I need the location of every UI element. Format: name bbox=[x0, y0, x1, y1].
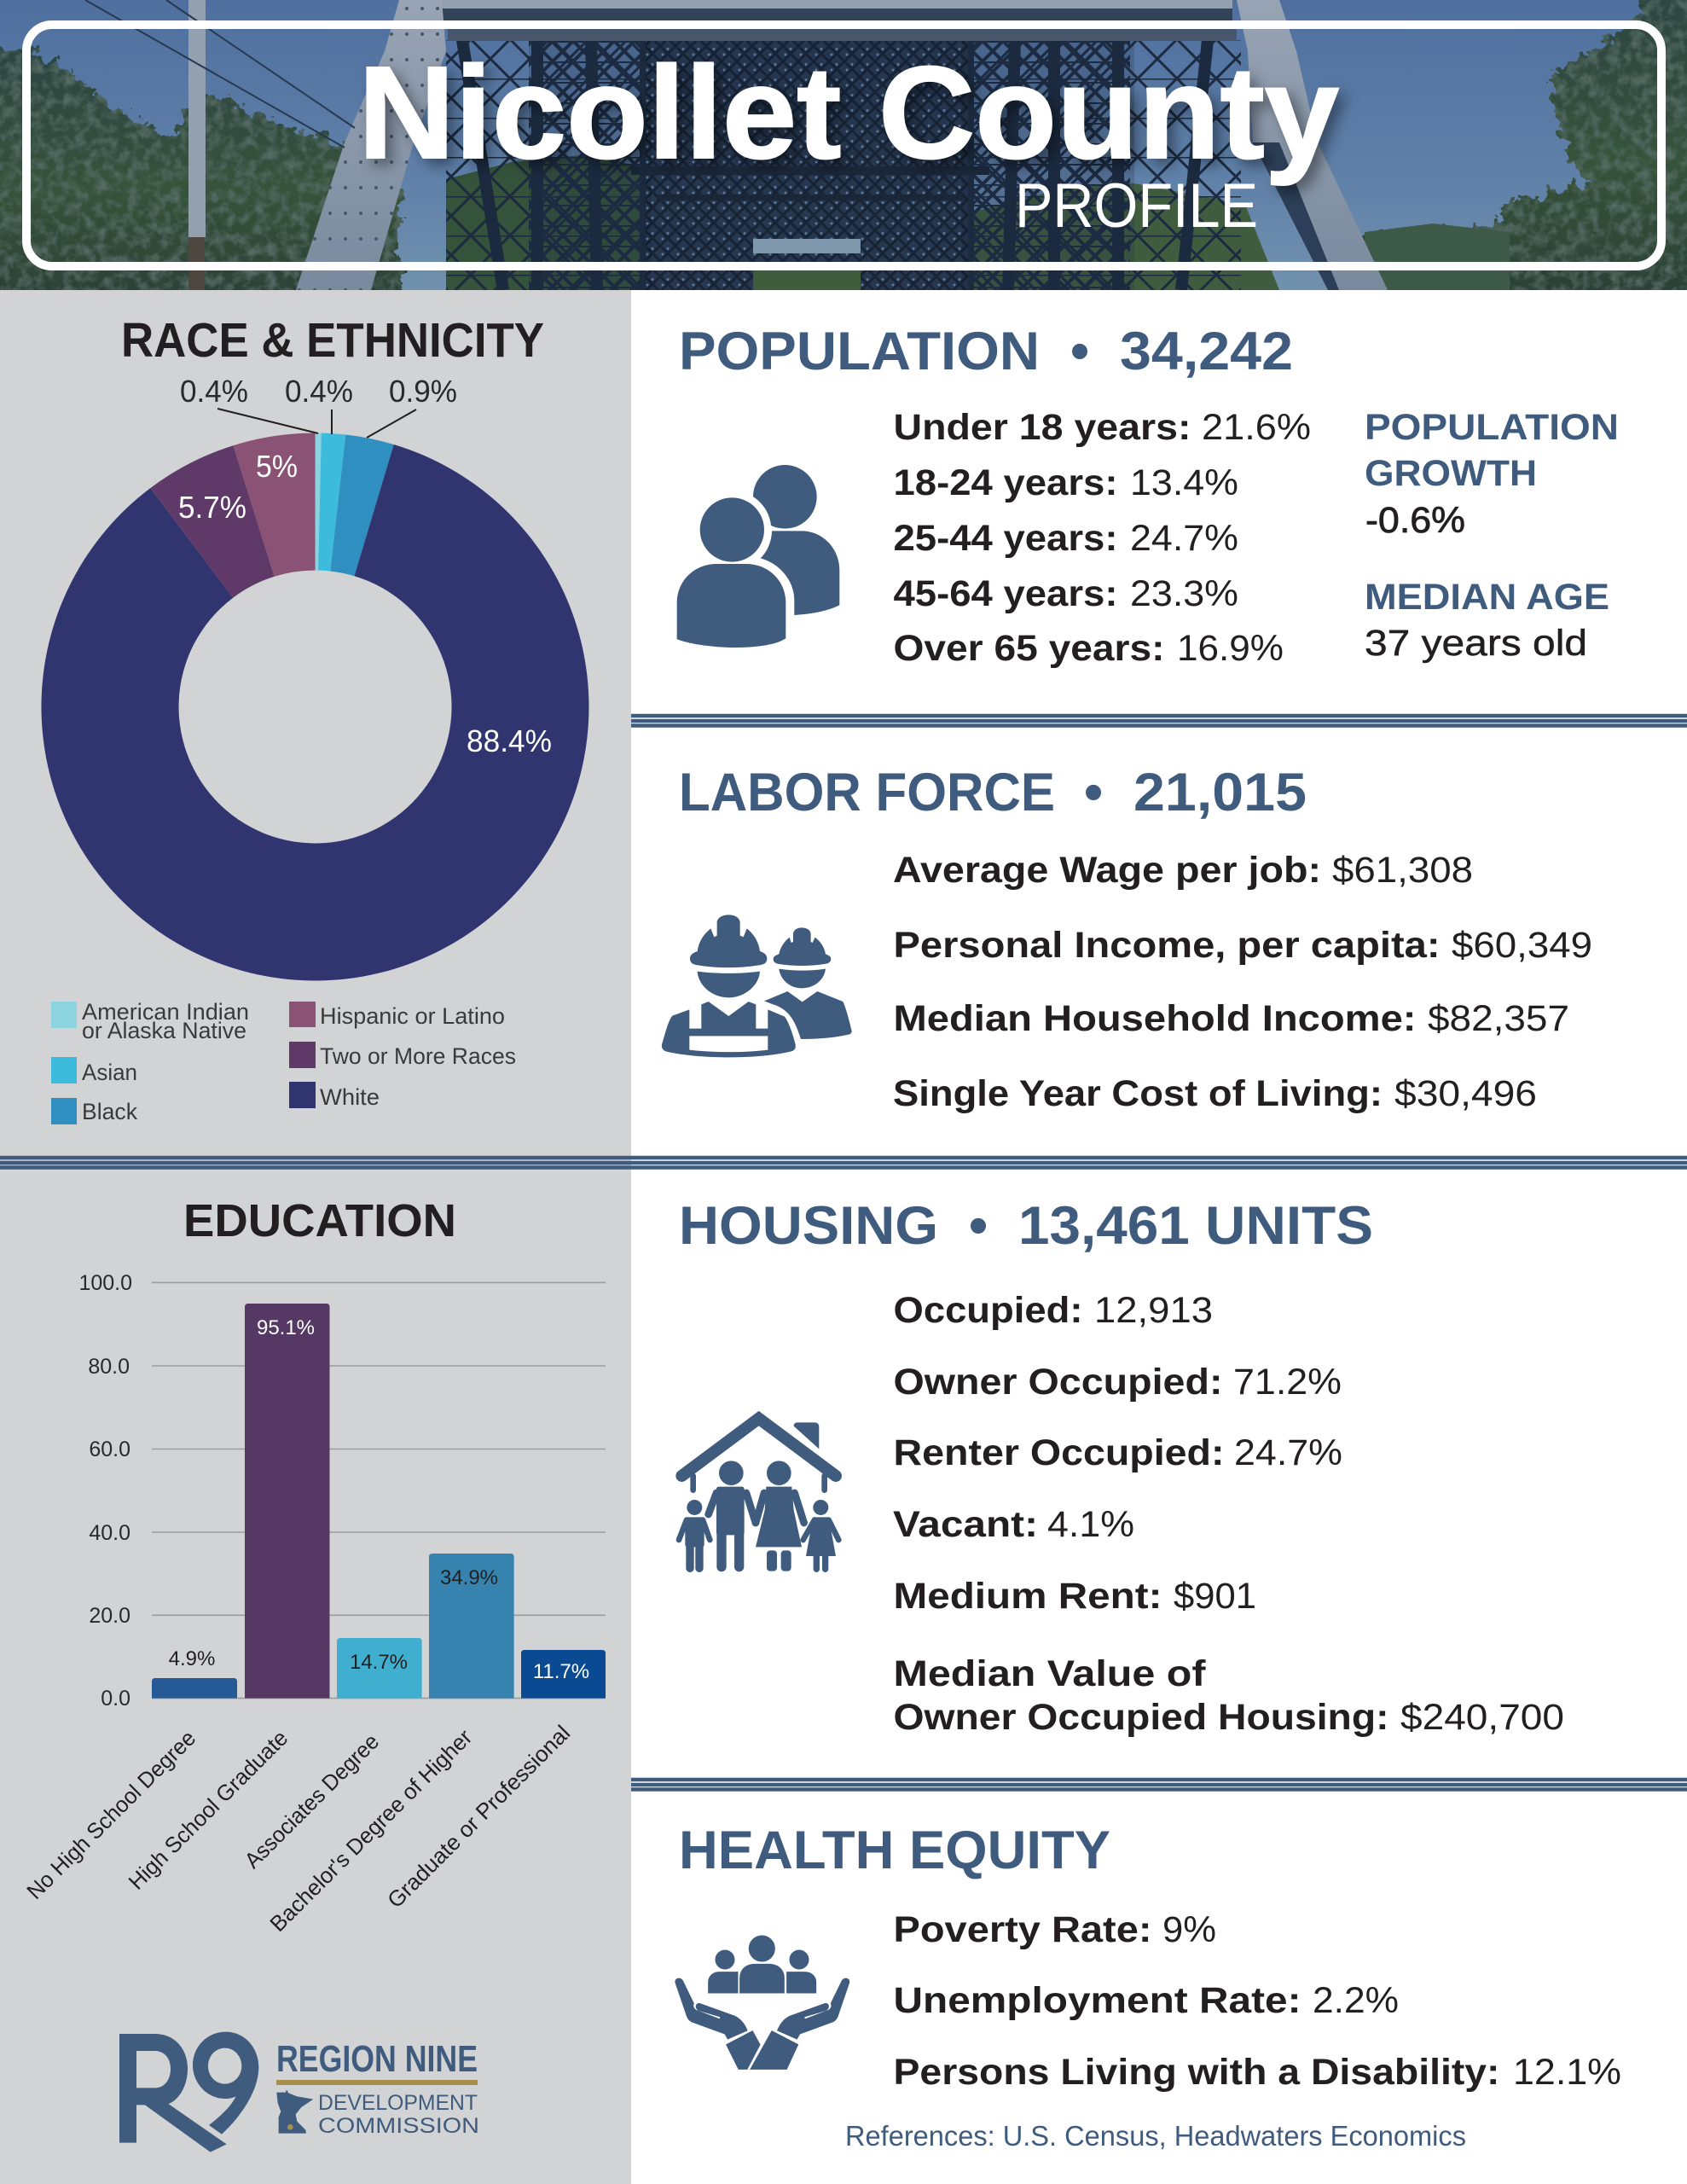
housing stats: $901 bbox=[1174, 1576, 1256, 1617]
heading: race and ethnicity: RACE & ETHNICITY bbox=[121, 313, 544, 368]
title: Nicollet County bbox=[358, 39, 1339, 186]
heading: housing: HOUSING bbox=[679, 1196, 938, 1256]
health stats: Unemployment Rate: bbox=[894, 1980, 1301, 2021]
legend: Black bbox=[82, 1099, 137, 1124]
labor stats: Average Wage per job: bbox=[893, 850, 1321, 891]
header photo: steel truss bridge bbox=[0, 0, 1687, 307]
housing stats: Renter Occupied: bbox=[894, 1432, 1225, 1473]
logo: Region Nine Development Commission: DEVELOPMENT bbox=[318, 2091, 478, 2115]
heading: education: EDUCATION bbox=[183, 1195, 456, 1246]
health stats: Persons Living with a Disability: bbox=[894, 2052, 1499, 2093]
heading: labor force: 21,015 bbox=[1133, 763, 1307, 822]
legend: or Alaska Native bbox=[82, 1018, 246, 1043]
legend: Two or More Races bbox=[320, 1043, 516, 1069]
labor stats: Median Household Income: bbox=[894, 998, 1416, 1039]
panel: race and ethnicity bbox=[41, 313, 588, 1124]
panel: health equity bbox=[675, 1821, 1621, 2152]
heading: labor force: LABOR FORCE bbox=[679, 763, 1055, 822]
title frame bbox=[26, 25, 1661, 266]
bar chart: 60.0 bbox=[89, 1438, 130, 1461]
legend: Hispanic or Latino bbox=[320, 1003, 505, 1029]
housing stats: 12,913 bbox=[1094, 1290, 1213, 1331]
labor stats: $82,357 bbox=[1428, 998, 1569, 1039]
heading: housing: • bbox=[969, 1196, 988, 1256]
housing stats: Occupied: bbox=[894, 1290, 1083, 1331]
population growth: GROWTH bbox=[1365, 453, 1537, 494]
labor stats bbox=[893, 850, 1592, 1114]
icon: two people bbox=[677, 465, 839, 648]
housing stats: Owner Occupied Housing: bbox=[894, 1697, 1388, 1738]
donut chart: 5% bbox=[256, 449, 298, 484]
donut chart: 0.4% bbox=[285, 374, 353, 409]
legend: White bbox=[320, 1084, 380, 1110]
heading: population bbox=[679, 322, 1293, 381]
donut chart bbox=[41, 374, 588, 980]
housing stats: 71.2% bbox=[1233, 1362, 1342, 1403]
age breakdown: Under 18 years: bbox=[894, 407, 1191, 448]
age breakdown: 23.3% bbox=[1130, 573, 1238, 614]
labor stats: Personal Income, per capita: bbox=[894, 925, 1440, 966]
references: References: U.S. Census, Headwaters Economics bbox=[845, 2120, 1466, 2152]
population growth bbox=[1365, 407, 1619, 541]
labor stats: $30,496 bbox=[1394, 1073, 1537, 1114]
bar chart: Graduate or Professional bbox=[382, 1720, 575, 1913]
icon: hands holding people bbox=[675, 1936, 849, 2069]
legend bbox=[51, 999, 516, 1124]
bar chart: 4.9% bbox=[169, 1647, 215, 1670]
housing stats: 4.1% bbox=[1047, 1504, 1134, 1545]
health stats: 2.2% bbox=[1313, 1980, 1399, 2021]
labor stats: $60,349 bbox=[1452, 925, 1592, 966]
health stats bbox=[894, 1909, 1621, 2093]
icon: workers bbox=[662, 915, 852, 1057]
housing stats: 24.7% bbox=[1234, 1432, 1342, 1473]
median age bbox=[1365, 577, 1609, 664]
heading: health equity: HEALTH EQUITY bbox=[679, 1821, 1110, 1880]
labor stats: $61,308 bbox=[1332, 850, 1473, 891]
heading: population: • bbox=[1070, 322, 1089, 381]
age breakdown: Over 65 years: bbox=[894, 628, 1165, 669]
panel: housing bbox=[679, 1196, 1564, 1738]
housing stats: $240,700 bbox=[1400, 1697, 1564, 1738]
donut chart: 0.9% bbox=[389, 374, 457, 409]
housing stats: Vacant: bbox=[893, 1504, 1038, 1545]
bar chart: 11.7% bbox=[533, 1660, 589, 1683]
labor stats: Single Year Cost of Living: bbox=[893, 1073, 1383, 1114]
heading: housing bbox=[679, 1196, 1373, 1256]
bar chart: 80.0 bbox=[88, 1355, 130, 1379]
median age: 37 years old bbox=[1365, 623, 1587, 664]
heading: labor force: • bbox=[1084, 763, 1103, 822]
panel: population bbox=[677, 322, 1619, 669]
housing stats: Owner Occupied: bbox=[894, 1362, 1223, 1403]
health stats: 12.1% bbox=[1513, 2052, 1621, 2093]
legend: Asian bbox=[82, 1060, 137, 1085]
age breakdown: 25-44 years: bbox=[894, 518, 1117, 559]
donut chart: 88.4% bbox=[467, 723, 552, 758]
population growth: -0.6% bbox=[1365, 500, 1465, 541]
donut chart: 0.4% bbox=[180, 374, 248, 409]
health stats: Poverty Rate: bbox=[894, 1909, 1151, 1950]
donut chart: 5.7% bbox=[178, 490, 246, 525]
age breakdown: 18-24 years: bbox=[894, 462, 1117, 503]
heading: housing: 13,461 UNITS bbox=[1018, 1196, 1373, 1256]
bar chart: Bachelor's Degree of Higher bbox=[264, 1724, 477, 1937]
housing stats: Medium Rent: bbox=[894, 1576, 1162, 1617]
age breakdown: 16.9% bbox=[1177, 628, 1284, 669]
heading: population: POPULATION bbox=[679, 322, 1040, 381]
icon: family under roof bbox=[679, 1419, 838, 1571]
population growth: POPULATION bbox=[1365, 407, 1619, 448]
bar chart: 34.9% bbox=[440, 1566, 498, 1589]
panel: education bbox=[21, 1195, 606, 1937]
bar chart: 95.1% bbox=[257, 1316, 315, 1339]
health stats: 9% bbox=[1162, 1909, 1216, 1950]
bar chart bbox=[21, 1271, 606, 1937]
bar chart: 40.0 bbox=[89, 1521, 130, 1545]
age breakdown: 21.6% bbox=[1202, 407, 1311, 448]
bar chart: High School Graduate bbox=[124, 1725, 293, 1895]
heading: labor force bbox=[679, 763, 1307, 822]
panel: labor force bbox=[662, 763, 1592, 1114]
logo mark: R9 bbox=[119, 2032, 313, 2152]
bar chart: No High School Degree bbox=[21, 1725, 200, 1904]
bar chart: 100.0 bbox=[78, 1271, 132, 1295]
logo wordmark: REGION NINE bbox=[276, 2038, 478, 2080]
housing stats: Median Value of bbox=[894, 1653, 1206, 1694]
heading: population: 34,242 bbox=[1120, 322, 1293, 381]
bar chart: Associates Degree bbox=[240, 1728, 384, 1873]
age breakdown bbox=[894, 407, 1311, 669]
logo: Region Nine Development Commission: COMMISSION bbox=[318, 2114, 479, 2138]
logo: Region Nine Development Commission bbox=[119, 2032, 479, 2152]
legend: American Indian bbox=[82, 999, 249, 1025]
housing stats bbox=[893, 1290, 1564, 1738]
bar chart: 0.0 bbox=[101, 1687, 130, 1711]
median age: MEDIAN AGE bbox=[1365, 577, 1609, 618]
age breakdown: 45-64 years: bbox=[894, 573, 1117, 614]
age breakdown: 13.4% bbox=[1130, 462, 1238, 503]
age breakdown: 24.7% bbox=[1130, 518, 1238, 559]
left gray column bbox=[0, 290, 631, 2184]
bar chart: 14.7% bbox=[350, 1651, 408, 1674]
subtitle: PROFILE bbox=[1015, 171, 1258, 241]
bar chart: 20.0 bbox=[89, 1604, 130, 1628]
